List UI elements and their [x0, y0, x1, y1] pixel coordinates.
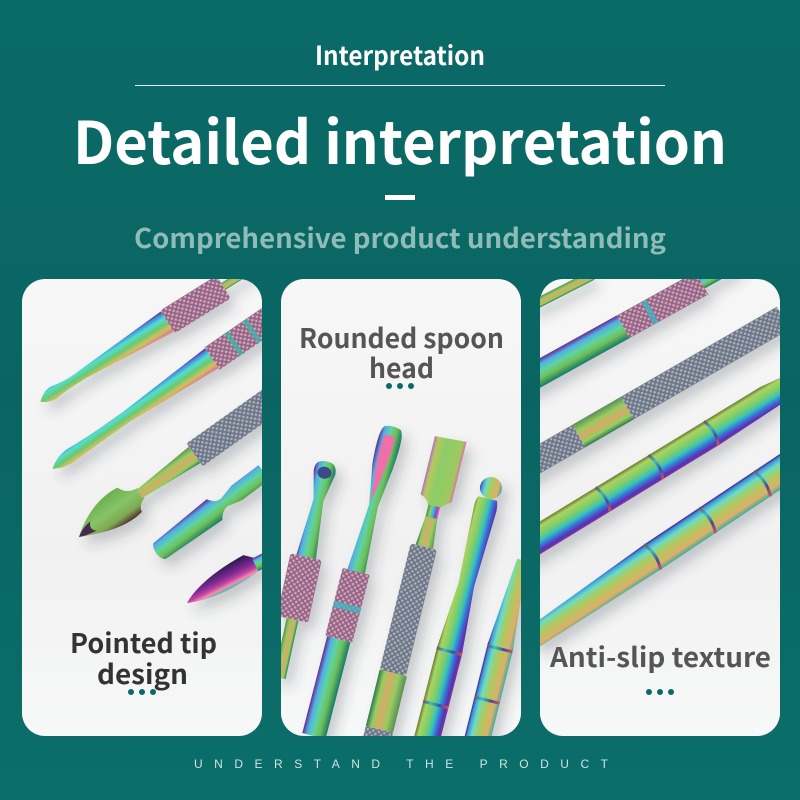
label: rounded spoon head: head: [369, 347, 434, 386]
tool: tapered ringed shaft: [540, 454, 780, 658]
tool: narrow tip pick: [40, 279, 257, 415]
label: anti-slip texture: Anti-slip texture: [549, 636, 771, 675]
footer tagline: UNDERSTAND THE PRODUCT: [194, 757, 609, 771]
dots: [386, 383, 414, 389]
label: pointed tip design: Pointed tip: [70, 622, 217, 661]
tool: square spatula: [359, 434, 467, 753]
tool: grey knurled handle: [514, 307, 790, 481]
tool: leaf shaped head: [79, 390, 262, 550]
label: rounded spoon head: Rounded spoon: [299, 317, 504, 356]
panel: rounded spoon head: [281, 279, 521, 736]
label: rounded spoon head: [301, 326, 502, 378]
tool: ringed handle: [464, 558, 521, 736]
tool: ringed shaft: [540, 378, 780, 572]
tool: ball head: [413, 474, 506, 749]
panel: pointed tip design: [22, 279, 262, 736]
label: pointed tip design: [72, 631, 216, 690]
tool: ear pick: [281, 461, 347, 691]
title: Detailed interpretation: [73, 96, 727, 181]
tool: purple blade: [187, 554, 262, 615]
dots: [128, 689, 156, 695]
tool: top edge shaft: [528, 271, 595, 311]
label: pointed tip design: design: [97, 653, 188, 692]
tool: spoon: [300, 423, 407, 739]
dots: [646, 689, 674, 695]
tool: flat spatula: [149, 462, 272, 564]
tool: slim blade: [52, 308, 262, 481]
title dash: [385, 195, 415, 200]
panel: anti-slip texture: [540, 279, 780, 736]
tool: pink knurled handle: [540, 279, 748, 406]
header label: Interpretation: [315, 36, 485, 73]
subtitle: Comprehensive product understanding: [134, 217, 666, 256]
